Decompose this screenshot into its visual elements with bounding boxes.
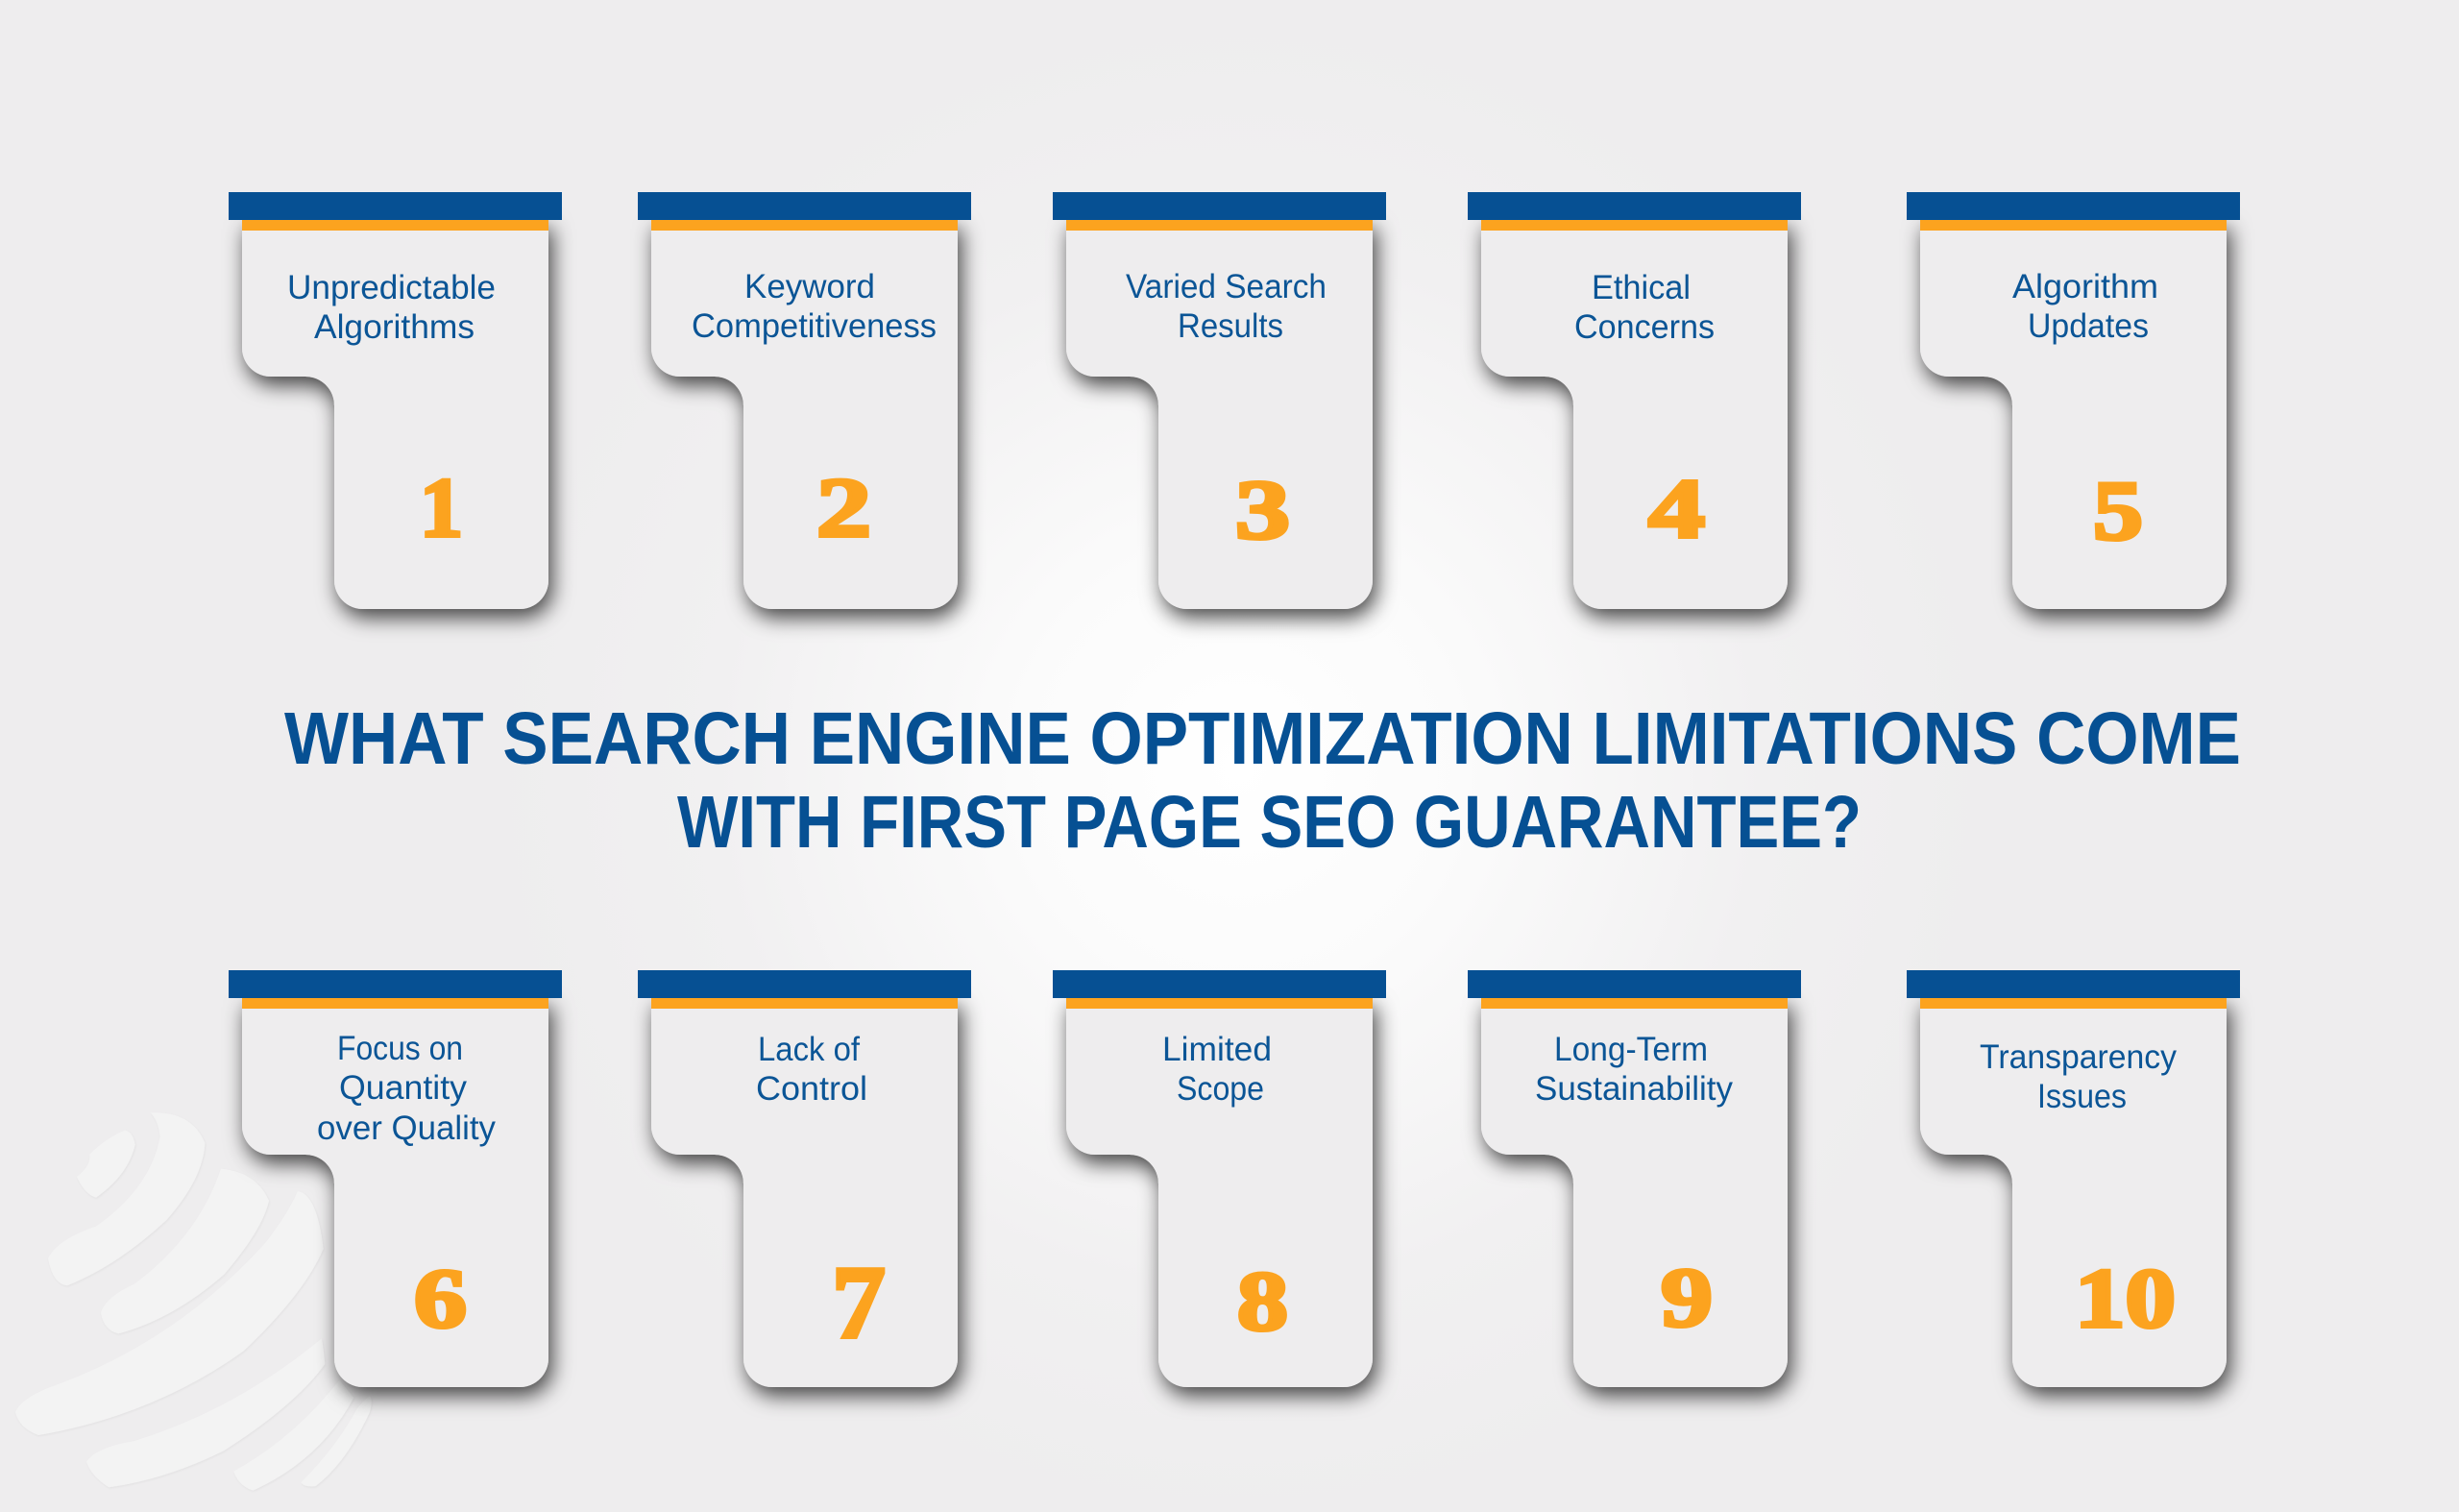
card 7: Lack of Control: Control <box>756 1070 867 1108</box>
card 4: Ethical Concerns: Ethical <box>1592 269 1691 306</box>
card 3: Varied Search Results: 3 <box>1235 464 1290 557</box>
card 6: Focus on Quantity over Quality: over Quality <box>317 1110 496 1147</box>
card 8: Limited Scope: 8 <box>1237 1256 1288 1349</box>
card 5: Algorithm Updates: Updates <box>2028 307 2149 345</box>
card 3: Varied Search Results <box>1053 192 1386 609</box>
card 6: Focus on Quantity over Quality: Quantity <box>339 1069 467 1107</box>
card 1: Unpredictable Algorithms: 1 <box>420 462 463 555</box>
card 6: Focus on Quantity over Quality: Focus on <box>337 1030 463 1067</box>
card 9: Long-Term Sustainability: Sustainability <box>1535 1070 1733 1108</box>
card 3: Varied Search Results: Results <box>1178 307 1283 345</box>
card 10: Transparency Issues: 10 <box>2075 1253 2176 1346</box>
card 4: Ethical Concerns <box>1468 192 1801 609</box>
card 4: Ethical Concerns: 4 <box>1648 463 1705 556</box>
card 8: Limited Scope <box>1053 970 1386 1387</box>
title <box>284 697 2241 864</box>
card 8: Limited Scope: Limited <box>1162 1031 1272 1068</box>
card 10: Transparency Issues: Transparency <box>1980 1038 2177 1076</box>
card 7: Lack of Control: 7 <box>832 1246 886 1360</box>
card 8: Limited Scope: Scope <box>1177 1070 1264 1108</box>
card 1: Unpredictable Algorithms: Unpredictable <box>287 269 496 306</box>
card 9: Long-Term Sustainability: 9 <box>1661 1252 1713 1345</box>
card 10: Transparency Issues <box>1907 970 2240 1387</box>
card 2: Keyword Competitiveness: Competitiveness <box>692 307 937 345</box>
card 2: Keyword Competitiveness: 2 <box>816 462 871 555</box>
card 2: Keyword Competitiveness: Keyword <box>744 268 875 305</box>
card 6: Focus on Quantity over Quality: 6 <box>414 1253 467 1346</box>
card 6: Focus on Quantity over Quality <box>229 970 562 1387</box>
card 7: Lack of Control <box>638 970 971 1387</box>
card 2: Keyword Competitiveness <box>638 192 971 609</box>
card 7: Lack of Control: Lack of <box>758 1031 860 1068</box>
card 9: Long-Term Sustainability: Long-Term <box>1554 1031 1708 1068</box>
card 1: Unpredictable Algorithms: Algorithms <box>314 308 475 346</box>
title: WITH FIRST PAGE SEO GUARANTEE? <box>677 781 1862 864</box>
card 9: Long-Term Sustainability <box>1468 970 1801 1387</box>
title: WHAT SEARCH ENGINE OPTIMIZATION LIMITATIONS COME <box>284 697 2241 780</box>
card 3: Varied Search Results: Varied Search <box>1126 268 1327 305</box>
card 5: Algorithm Updates <box>1907 192 2240 609</box>
globe watermark <box>15 1112 372 1491</box>
card 10: Transparency Issues: Issues <box>2037 1078 2127 1115</box>
card 1: Unpredictable Algorithms <box>229 192 562 609</box>
card 5: Algorithm Updates: 5 <box>2093 465 2143 558</box>
card 4: Ethical Concerns: Concerns <box>1574 308 1715 346</box>
card 5: Algorithm Updates: Algorithm <box>2012 268 2158 305</box>
